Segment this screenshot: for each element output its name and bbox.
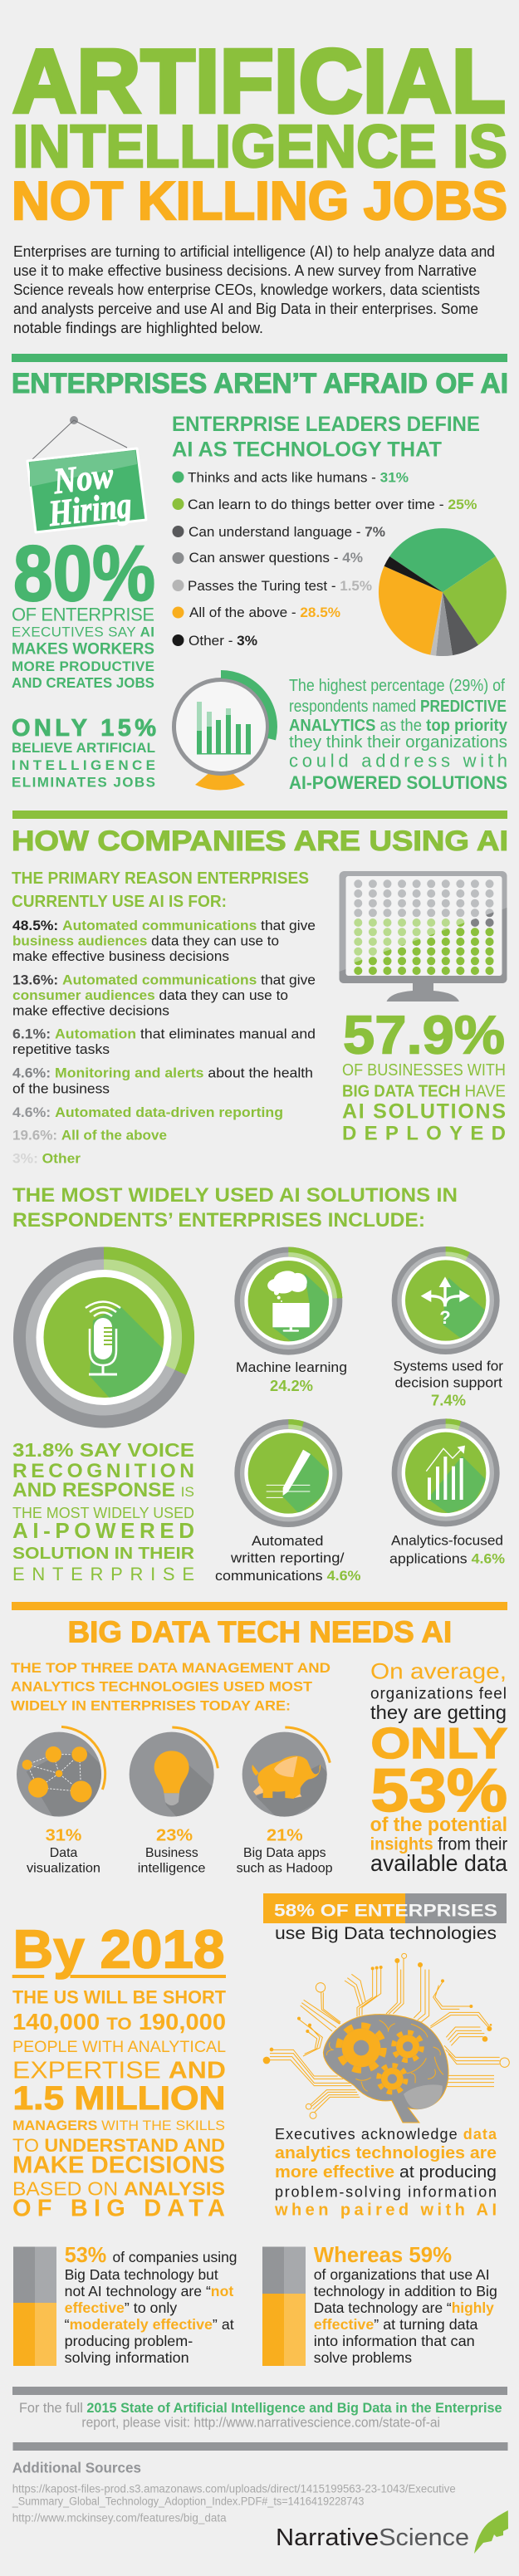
list: primary reasons: 4.6%: Automated data-driven reporting [12,1105,283,1120]
icon: voice recognition ring 31.8 percent [13,1247,194,1428]
text: 53 percent not effective: solving information [65,2349,189,2366]
list: primary reasons: 3%: Other [12,1151,81,1166]
icon: monitor dot matrix [339,871,507,1002]
icon: hadoop elephant [242,1727,330,1818]
title: INTELLIGENCE IS [12,114,507,180]
labels: solutions [215,1359,505,1584]
heading: top three technologies: THE TOP THREE DATA MANAGEMENT AND [11,1660,330,1676]
stat: by 2018: By 2018 [13,1918,224,1980]
section bar: orange [12,1602,507,1610]
stat: by 2018: MAKE DECISIONS [12,2152,225,2179]
section bar: light green [12,811,507,819]
stat: only 53 percent: they are getting [370,1702,507,1723]
heading: primary reason [12,869,309,911]
text: 31.8 percent voice recognition: 31.8% SAY VOICE [12,1439,194,1461]
additional sources: Additional Sources [12,2460,141,2476]
icon: globe bar chart [174,674,273,791]
labels: top three technologies: intelligence [138,1862,206,1875]
legend list: Thinks and acts like humans - 31% [188,470,409,485]
text: 31.8 percent voice recognition [12,1439,194,1584]
labels: top three technologies: 23% [156,1827,193,1845]
heading: enterprise leaders define: ENTERPRISE LEADERS DEFINE [172,413,480,436]
icon: now hiring sign [27,416,146,534]
additional sources: https://kapost-files-prod.s3.amazonaws.com/uploads/direct/1415199563-23-1043/Executive [12,2483,456,2495]
bar: 53 percent [13,2247,56,2366]
text: 53 percent not effective: 53% [65,2242,106,2267]
text: 31.8 percent voice recognition: AND RESPONSE IS [12,1479,194,1501]
heading: primary reason: CURRENTLY USE AI IS FOR: [12,892,227,911]
intro paragraph: Enterprises are turning to artificial intelligence (AI) to help analyze data and [13,243,495,260]
text: executives acknowledge: analytics technologies are [275,2144,497,2162]
text: 53 percent not effective [65,2242,237,2366]
text: 31.8 percent voice recognition: RECOGNITION [12,1460,194,1482]
icon: now hiring sign: Now [51,454,115,502]
icon: business intelligence bulb [130,1727,218,1818]
text: executives acknowledge: when paired with AI [274,2201,497,2219]
labels: solutions: Systems used for [394,1359,503,1374]
text: 31.8 percent voice recognition: THE MOST WIDELY USED [12,1504,194,1521]
stat: 80 percent: OF ENTERPRISE [12,605,154,624]
text: 53 percent not effective: not AI technology are “not [65,2283,233,2299]
text: full report call to action: report, please visit: http://www.narrativescience.com/state-of-ai [81,2415,440,2430]
labels: top three technologies: Business [145,1846,198,1860]
stat: only 53 percent: available data [370,1850,507,1876]
text: executives acknowledge: problem-solving information [275,2184,497,2201]
icon: now hiring sign: Hiring [46,484,134,534]
list: primary reasons: consumer audiences data they can use to [12,988,288,1003]
intro paragraph: use it to make effective business decisions. A new survey from Narrative [13,262,477,279]
additional sources: _Summary_Global_Technology_Adoption_Index.PDF#_ts=1416419228743 [12,2495,364,2508]
labels: top three technologies: Data [50,1846,77,1860]
list: primary reasons: business audiences data they can use to [12,933,279,948]
text: 53 percent not effective: Big Data technology but [65,2266,218,2283]
logo: narrative science: NarrativeScience [276,2525,469,2551]
stat: 80 percent: AND CREATES JOBS [12,674,154,691]
heading: most widely used: THE MOST WIDELY USED AI SOLUTIONS IN [12,1184,458,1207]
labels: solutions: Analytics-focused [391,1533,503,1548]
labels: top three technologies: such as Hadoop [237,1862,333,1875]
pie chart [379,528,507,656]
text: whereas 59 percent: Whereas 59% [314,2242,452,2267]
list: primary reasons: 6.1%: Automation that eliminates manual and [12,1026,316,1041]
icon: analytics ring [392,1418,500,1526]
stat: by 2018: OF BIG DATA [12,2196,225,2222]
heading: top three technologies: ANALYTICS TECHNOLOGIES USED MOST [11,1679,313,1694]
banner: 58 percent of enterprises: use Big Data technologies [275,1924,497,1943]
icon: machine learning ring [234,1247,342,1355]
list: primary reasons: make effective decisions [12,1003,169,1018]
list: primary reasons: 48.5%: Automated communications that give [12,918,316,933]
stat: only 53 percent: On average, [370,1659,507,1684]
text: 31.8 percent voice recognition: SOLUTION IN THEIR [12,1544,194,1563]
text: executives acknowledge: more effective at producing [275,2163,497,2182]
labels: top three technologies: 31% [46,1827,82,1845]
stat: by 2018: PEOPLE WITH ANALYTICAL [12,2039,226,2056]
stat: only 15 percent: ONLY 15% [12,715,156,742]
intro paragraph: Science reveals how enterprise CEOs, knowledge workers, data scientists [13,282,480,298]
text: full report call to action [19,2401,502,2430]
additional sources [12,2460,456,2525]
stat: 57.9 percent: DEPLOYED [342,1123,506,1144]
stat: 57.9 percent: BIG DATA TECH HAVE [342,1083,506,1101]
legend list: Other - 3% [189,634,257,649]
stat: 80 percent [12,530,155,691]
list: primary reasons: 13.6%: Automated communications that give [12,973,316,988]
heading: primary reason: THE PRIMARY REASON ENTERPRISES [12,869,309,888]
intro paragraph: notable findings are highlighted below. [13,320,263,336]
text: predictive analytics: AI-POWERED SOLUTIONS [289,772,507,793]
heading: most widely used [12,1184,458,1232]
heading: enterprise leaders define [172,413,480,462]
icon: decision support ring [392,1246,500,1354]
stat: 57.9 percent: AI SOLUTIONS [342,1099,506,1123]
list: primary reasons: repetitive tasks [12,1042,110,1057]
stat: 57.9 percent [342,1005,506,1144]
divider bar: gray top [12,2387,507,2395]
title: NOT KILLING JOBS [12,170,507,231]
list: primary reasons [12,918,316,1166]
logo: narrative science [276,2510,508,2554]
labels: solutions: communications 4.6% [215,1568,361,1584]
legend list: All of the above - 28.5% [189,605,340,620]
text: whereas 59 percent [314,2242,497,2366]
additional sources: http://www.mckinsey.com/features/big_data [12,2511,227,2525]
labels: top three technologies: Big Data apps [243,1846,326,1860]
legend list: Can answer questions - 4% [189,551,363,566]
stat: by 2018: MANAGERS WITH THE SKILLS [12,2118,225,2133]
text: executives acknowledge [274,2126,497,2219]
icon: decision support ring: ? [439,1307,451,1328]
text: whereas 59 percent: effective” at turning data [314,2316,478,2333]
heading: enterprises aren't afraid of AI: ENTERPRISES AREN’T AFRAID OF AI [12,368,508,399]
stat: only 15 percent: INTELLIGENCE [12,757,155,773]
heading: most widely used: RESPONDENTS’ ENTERPRISES INCLUDE: [12,1209,425,1232]
stat: by 2018: TO UNDERSTAND AND [12,2135,225,2156]
stat: only 53 percent: insights from their [370,1835,507,1854]
labels: solutions: written reporting/ [230,1550,345,1566]
heading: how companies are using AI: HOW COMPANIES ARE USING AI [12,825,508,857]
heading: big data tech needs AI: BIG DATA TECH NEEDS AI [68,1614,452,1649]
stat: by 2018: THE US WILL BE SHORT [12,1986,227,2008]
text: 53 percent not effective: effective” to only [65,2299,177,2316]
section bar: green [12,354,507,362]
stat: 80 percent: MAKES WORKERS [12,639,154,658]
text: predictive analytics: they think their organizations [289,733,507,752]
stat: only 53 percent [370,1659,507,1876]
icon: data visualization [17,1726,105,1817]
text: predictive analytics: could address with [289,751,507,771]
divider bar: gray bottom [13,2442,508,2451]
labels: top three technologies [27,1827,333,1875]
stat: by 2018: EXPERTISE AND [12,2058,226,2084]
stat: only 53 percent: of the potential [370,1814,507,1836]
text: executives acknowledge: Executives acknowledge data [275,2126,497,2143]
stat: only 15 percent [12,715,156,791]
stat: by 2018: BASED ON ANALYSIS [12,2177,225,2199]
legend list: Can understand language - 7% [189,525,385,540]
title [12,31,507,231]
text: full report call to action: For the full 2015 State of Artificial Intelligence and Big Data in the Enterprise [19,2401,502,2416]
stat: 80 percent: EXECUTIVES SAY AI [12,624,154,639]
stat: by 2018 [12,1918,227,2222]
stat: only 53 percent: ONLY [370,1720,507,1768]
list: primary reasons: make effective business decisions [12,949,229,964]
list: primary reasons: 4.6%: Monitoring and alerts about the health [12,1066,313,1081]
labels: solutions: Machine learning [236,1359,347,1375]
legend list: Can learn to do things better over time - 25% [188,497,477,512]
banner: 58 percent of enterprises: 58% OF ENTERPRISES [274,1900,497,1920]
icon: brain with gears and circuits [263,1953,509,2123]
text: predictive analytics [289,677,508,793]
stat: 80 percent: MORE PRODUCTIVE [12,659,154,674]
heading: top three technologies [11,1660,330,1714]
labels: solutions: decision support [395,1375,502,1390]
text: 31.8 percent voice recognition: ENTERPRISE [12,1564,194,1584]
stat: 57.9 percent: 57.9% [343,1005,505,1065]
stat: only 15 percent: ELIMINATES JOBS [12,774,155,791]
text: 53 percent not effective: “moderately effective” at [65,2316,234,2333]
text: 31.8 percent voice recognition: AI-POWERED [12,1518,194,1543]
icon: written reporting ring [234,1419,342,1527]
labels: solutions: applications 4.6% [389,1551,505,1566]
labels: top three technologies: 21% [267,1827,303,1845]
labels: solutions: 24.2% [270,1378,313,1394]
stat: only 53 percent: 53% [370,1757,507,1824]
text: predictive analytics: respondents named PREDICTIVE [289,698,507,716]
legend list [173,470,477,649]
labels: solutions: Automated [252,1533,324,1549]
text: 53 percent not effective: of companies using [113,2249,237,2265]
text: whereas 59 percent: Data technology are “highly [314,2299,494,2316]
stat: only 15 percent: BELIEVE ARTIFICIAL [12,740,155,756]
title: ARTIFICIAL [12,31,506,132]
stat: 80 percent: 80% [13,530,155,618]
stat: by 2018: 1.5 MILLION [13,2080,226,2117]
text: 53 percent not effective: producing problem- [65,2333,193,2349]
stat: by 2018: 140,000 TO 190,000 [12,2009,226,2035]
stat: only 53 percent: organizations feel [370,1686,507,1702]
legend list: Passes the Turing test - 1.5% [188,579,372,594]
heading: enterprise leaders define: AI AS TECHNOLOGY THAT [172,438,442,462]
text: whereas 59 percent: solve problems [314,2349,412,2366]
text: whereas 59 percent: technology in addition to Big [314,2283,497,2299]
labels: top three technologies: visualization [27,1862,100,1875]
heading: top three technologies: WIDELY IN ENTERPRISES TODAY ARE: [11,1697,291,1714]
list: primary reasons: 19.6%: All of the above [12,1128,167,1143]
bar: 59 percent [262,2247,306,2366]
text: whereas 59 percent: of organizations that use AI [314,2266,490,2283]
text: whereas 59 percent: into information that can [314,2333,475,2349]
text: predictive analytics: ANALYTICS as the top priority [289,717,508,735]
banner: 58 percent of enterprises [263,1893,507,1943]
intro paragraph: and analysts perceive and use AI and Big Data in their enterprises. Some [13,301,478,317]
labels: solutions: 7.4% [431,1392,466,1408]
list: primary reasons: of the business [12,1081,110,1096]
intro paragraph [13,243,495,336]
